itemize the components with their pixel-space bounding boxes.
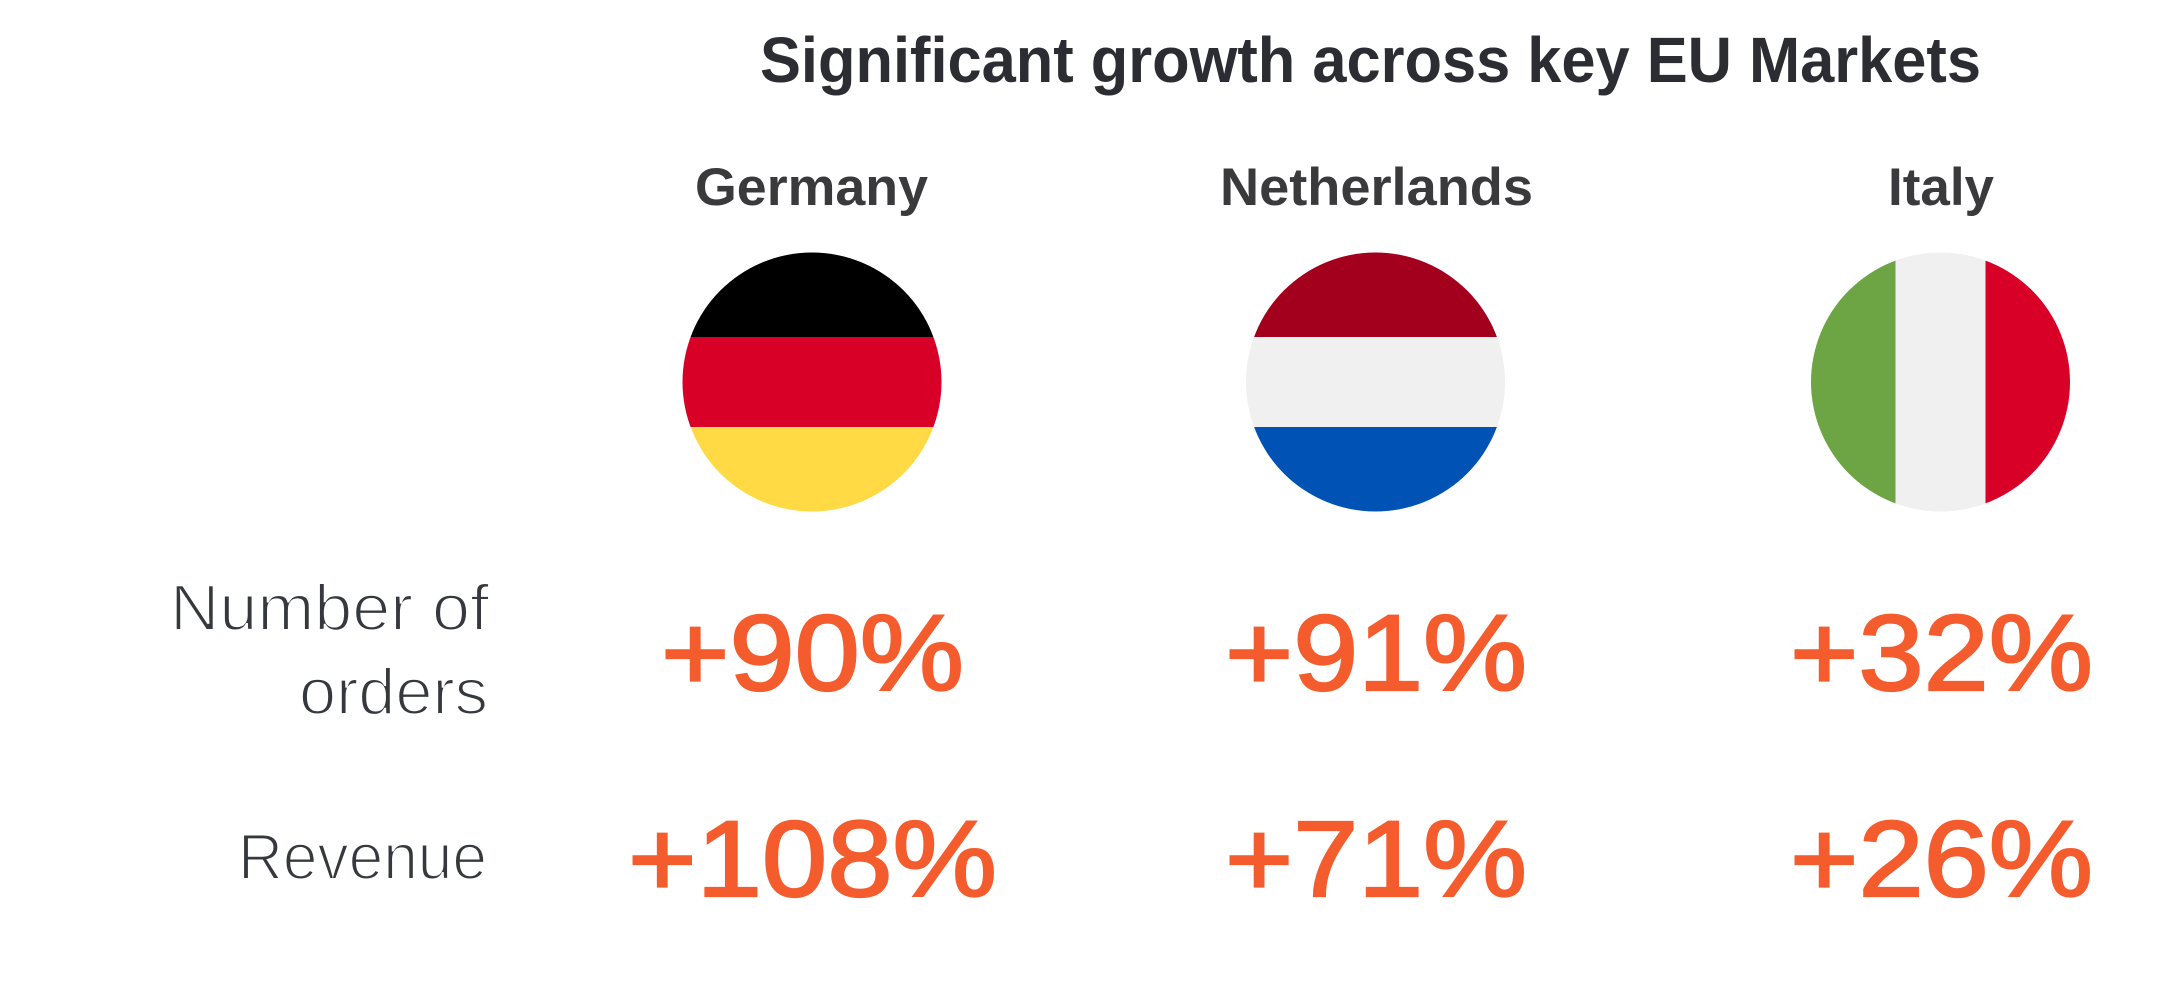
value: Italy revenue: +26% (1790, 798, 2093, 919)
value: Netherlands revenue: +71% (1225, 798, 1527, 919)
value: Germany revenue: +108% (628, 798, 997, 919)
title: Significant growth across key EU Markets (760, 24, 1981, 96)
infographic canvas (176, 36, 2090, 898)
heading: Netherlands: Netherlands (1220, 158, 1533, 217)
row label: Number of orders: orders (299, 655, 488, 728)
row label: Number of orders (170, 571, 490, 728)
heading: Germany: Germany (695, 158, 929, 217)
icon: German flag (682, 252, 942, 512)
value: Netherlands number of orders: +91% (1225, 592, 1527, 713)
heading: Italy: Italy (1888, 158, 1995, 217)
row label: Revenue: Revenue (238, 820, 487, 893)
icon: Dutch flag (1245, 252, 1506, 512)
value: Germany number of orders: +90% (661, 592, 964, 713)
icon: Italian flag (1811, 252, 2070, 512)
value: Italy number of orders: +32% (1790, 592, 2093, 713)
row label: Number of orders: Number of (170, 571, 490, 644)
